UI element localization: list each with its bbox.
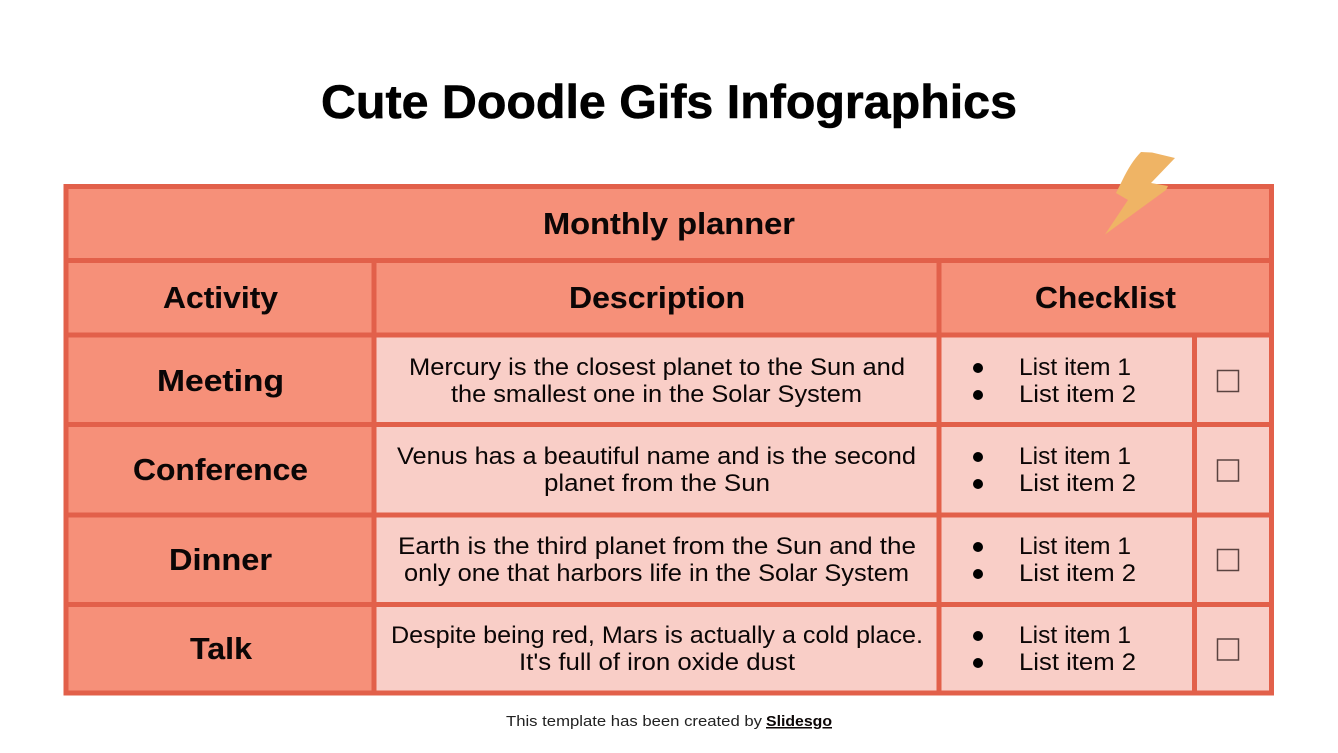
checklist: dinner: List item 2: [1019, 560, 1136, 587]
description: conference: Venus has a beautiful name and is the second: [397, 443, 916, 470]
checklist: conference: List item 1: [1019, 443, 1131, 470]
description: dinner: Earth is the third planet from the Sun and the: [398, 533, 916, 560]
column heading: checklist: Checklist: [1035, 280, 1176, 315]
checklist: meeting: List item 2: [1019, 381, 1136, 408]
checklist: conference: List item 2: [1019, 470, 1136, 497]
row label: meeting: Meeting: [157, 363, 284, 398]
description: talk: It's full of iron oxide dust: [519, 649, 795, 676]
description: meeting: [409, 354, 905, 408]
description: dinner: only one that harbors life in the Solar System: [404, 560, 909, 587]
checklist: talk: List item 1: [1019, 622, 1131, 649]
icon: lightning bolt: [1105, 152, 1175, 234]
checkboxes: [1218, 370, 1238, 660]
column heading: activity: Activity: [163, 280, 279, 315]
table: monthly planner: [64, 186, 1274, 693]
heading: monthly planner: Monthly planner: [543, 206, 795, 241]
footer credit: Slidesgo: [766, 713, 832, 730]
table header fills: [66, 186, 1271, 693]
checklist: meeting: [973, 354, 1136, 408]
footer credit: This template has been created by: [506, 713, 763, 730]
checklist: conference: [973, 443, 1136, 497]
row label: talk: Talk: [190, 631, 253, 666]
row label: dinner: Dinner: [169, 542, 272, 577]
checklist: talk: [973, 622, 1136, 676]
checklist: talk: List item 2: [1019, 649, 1136, 676]
description: meeting: Mercury is the closest planet to the Sun and: [409, 354, 905, 381]
description: conference: planet from the Sun: [544, 470, 770, 497]
description and checklist cell fills: [374, 335, 1271, 693]
checklist: dinner: List item 1: [1019, 533, 1131, 560]
description: conference: [397, 443, 916, 497]
title: Cute Doodle Gifs Infographics: [321, 75, 1017, 128]
description: talk: [391, 622, 923, 676]
checklist: dinner: [973, 533, 1136, 587]
table grid lines: [64, 186, 1274, 693]
column heading: description: Description: [569, 280, 745, 315]
row label: conference: Conference: [133, 452, 308, 487]
description: meeting: the smallest one in the Solar System: [451, 381, 862, 408]
description: talk: Despite being red, Mars is actually a cold place.: [391, 622, 923, 649]
description: dinner: [398, 533, 916, 587]
checklist: meeting: List item 1: [1019, 354, 1131, 381]
